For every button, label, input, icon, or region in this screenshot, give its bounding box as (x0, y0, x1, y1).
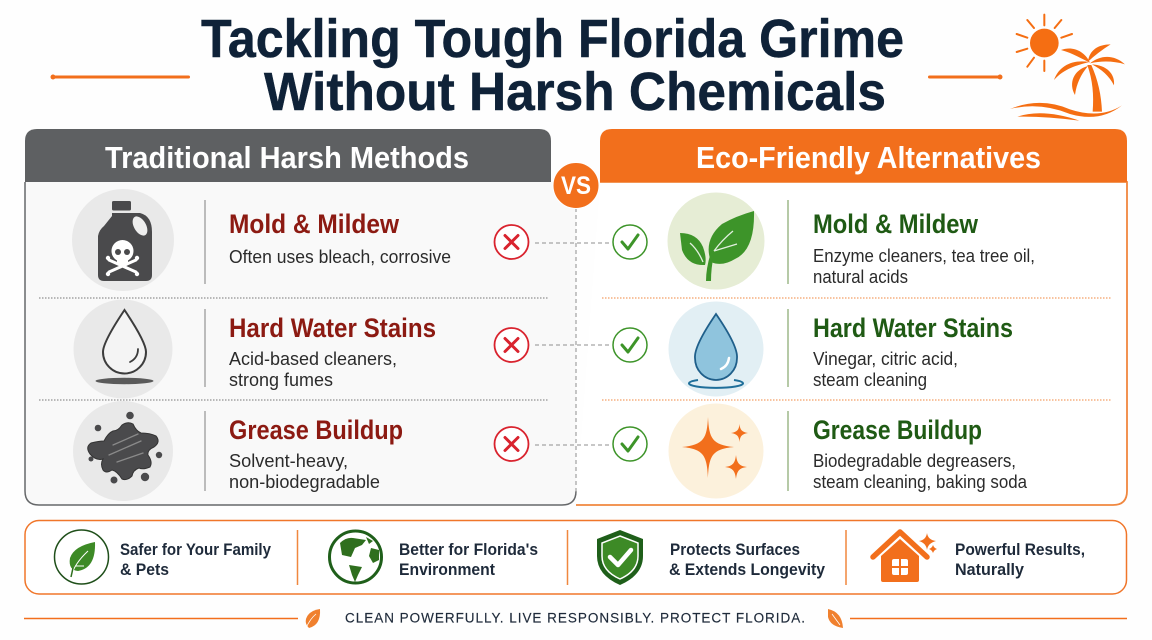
benefit: powerful results: Powerful Results, (955, 541, 1085, 559)
benefit: protects surfaces: & Extends Longevity (669, 561, 826, 579)
row text: mold and mildew (229, 209, 451, 267)
icon: sparkles (668, 404, 764, 498)
vs badge: VS (561, 172, 591, 200)
row text: grease buildup eco: Biodegradable degreasers, (813, 451, 1016, 471)
right title accent line (928, 74, 1002, 80)
row text: grease buildup: Solvent-heavy, (229, 451, 348, 471)
row text: hard water stains eco: steam cleaning (813, 370, 927, 390)
icon: grease splat (73, 401, 173, 501)
icon: water drop (74, 300, 172, 398)
row text: grease buildup eco (813, 415, 1028, 492)
row text: hard water stains: strong fumes (229, 370, 333, 390)
panel header: eco-friendly: Eco-Friendly Alternatives (696, 140, 1041, 175)
row text: hard water stains eco: Hard Water Stains (813, 313, 1013, 343)
row text: hard water stains eco (813, 313, 1013, 390)
benefit: protects surfaces (597, 530, 826, 585)
green check markers (613, 225, 647, 461)
benefit: family and pets: Safer for Your Family (120, 541, 272, 559)
icon: blue water drop (668, 302, 764, 396)
row text: hard water stains eco: Vinegar, citric acid, (813, 349, 958, 369)
row text: hard water stains: Acid-based cleaners, (229, 349, 397, 369)
title (201, 9, 904, 122)
row text: grease buildup: Grease Buildup (229, 415, 403, 445)
row text: grease buildup eco: Grease Buildup (813, 415, 982, 445)
row text: mold and mildew eco (813, 209, 1035, 287)
panel: traditional harsh methods (25, 129, 576, 505)
benefit: powerful results (873, 532, 1085, 582)
benefit: powerful results: Naturally (955, 561, 1025, 579)
row text: hard water stains (229, 313, 436, 390)
row text: mold and mildew: Often uses bleach, corrosive (229, 247, 451, 267)
title: Tackling Tough Florida Grime (201, 9, 904, 69)
row text: mold and mildew: Mold & Mildew (229, 209, 400, 239)
benefit: florida environment: Environment (399, 561, 495, 579)
benefit: florida environment (330, 531, 538, 583)
left title accent line (50, 74, 190, 80)
icon: footer leaf left (306, 609, 320, 628)
footer tagline: CLEAN POWERFULLY. LIVE RESPONSIBLY. PROTECT FLORIDA. (345, 610, 805, 626)
row text: mold and mildew eco: natural acids (813, 267, 908, 287)
icon: green leaves (668, 192, 764, 290)
benefit: florida environment: Better for Florida's (399, 541, 538, 559)
comparison connectors (535, 208, 610, 492)
vs badge (553, 162, 599, 208)
row text: grease buildup: non-biodegradable (229, 472, 380, 492)
panel: eco-friendly alternatives (576, 129, 1127, 505)
red cross markers (494, 225, 528, 461)
row text: hard water stains: Hard Water Stains (229, 313, 436, 343)
panel header: traditional: Traditional Harsh Methods (105, 140, 469, 175)
benefit: family and pets: & Pets (120, 561, 169, 579)
panel header: eco-friendly (600, 129, 1127, 182)
row text: grease buildup eco: steam cleaning, baking soda (813, 472, 1028, 492)
row text: grease buildup (229, 415, 403, 492)
footer tagline (24, 609, 1127, 628)
benefits bar (25, 520, 1126, 594)
row text: mold and mildew eco: Mold & Mildew (813, 209, 979, 239)
row text: mold and mildew eco: Enzyme cleaners, tea tree oil, (813, 246, 1035, 266)
benefit: protects surfaces: Protects Surfaces (670, 541, 800, 559)
icon: poison bottle (72, 189, 174, 291)
title: Without Harsh Chemicals (264, 62, 886, 122)
icon: footer leaf right (828, 609, 843, 628)
icon: sun and palm tree (1010, 15, 1125, 121)
benefit: family and pets (54, 530, 272, 584)
panel header: traditional (25, 129, 551, 182)
